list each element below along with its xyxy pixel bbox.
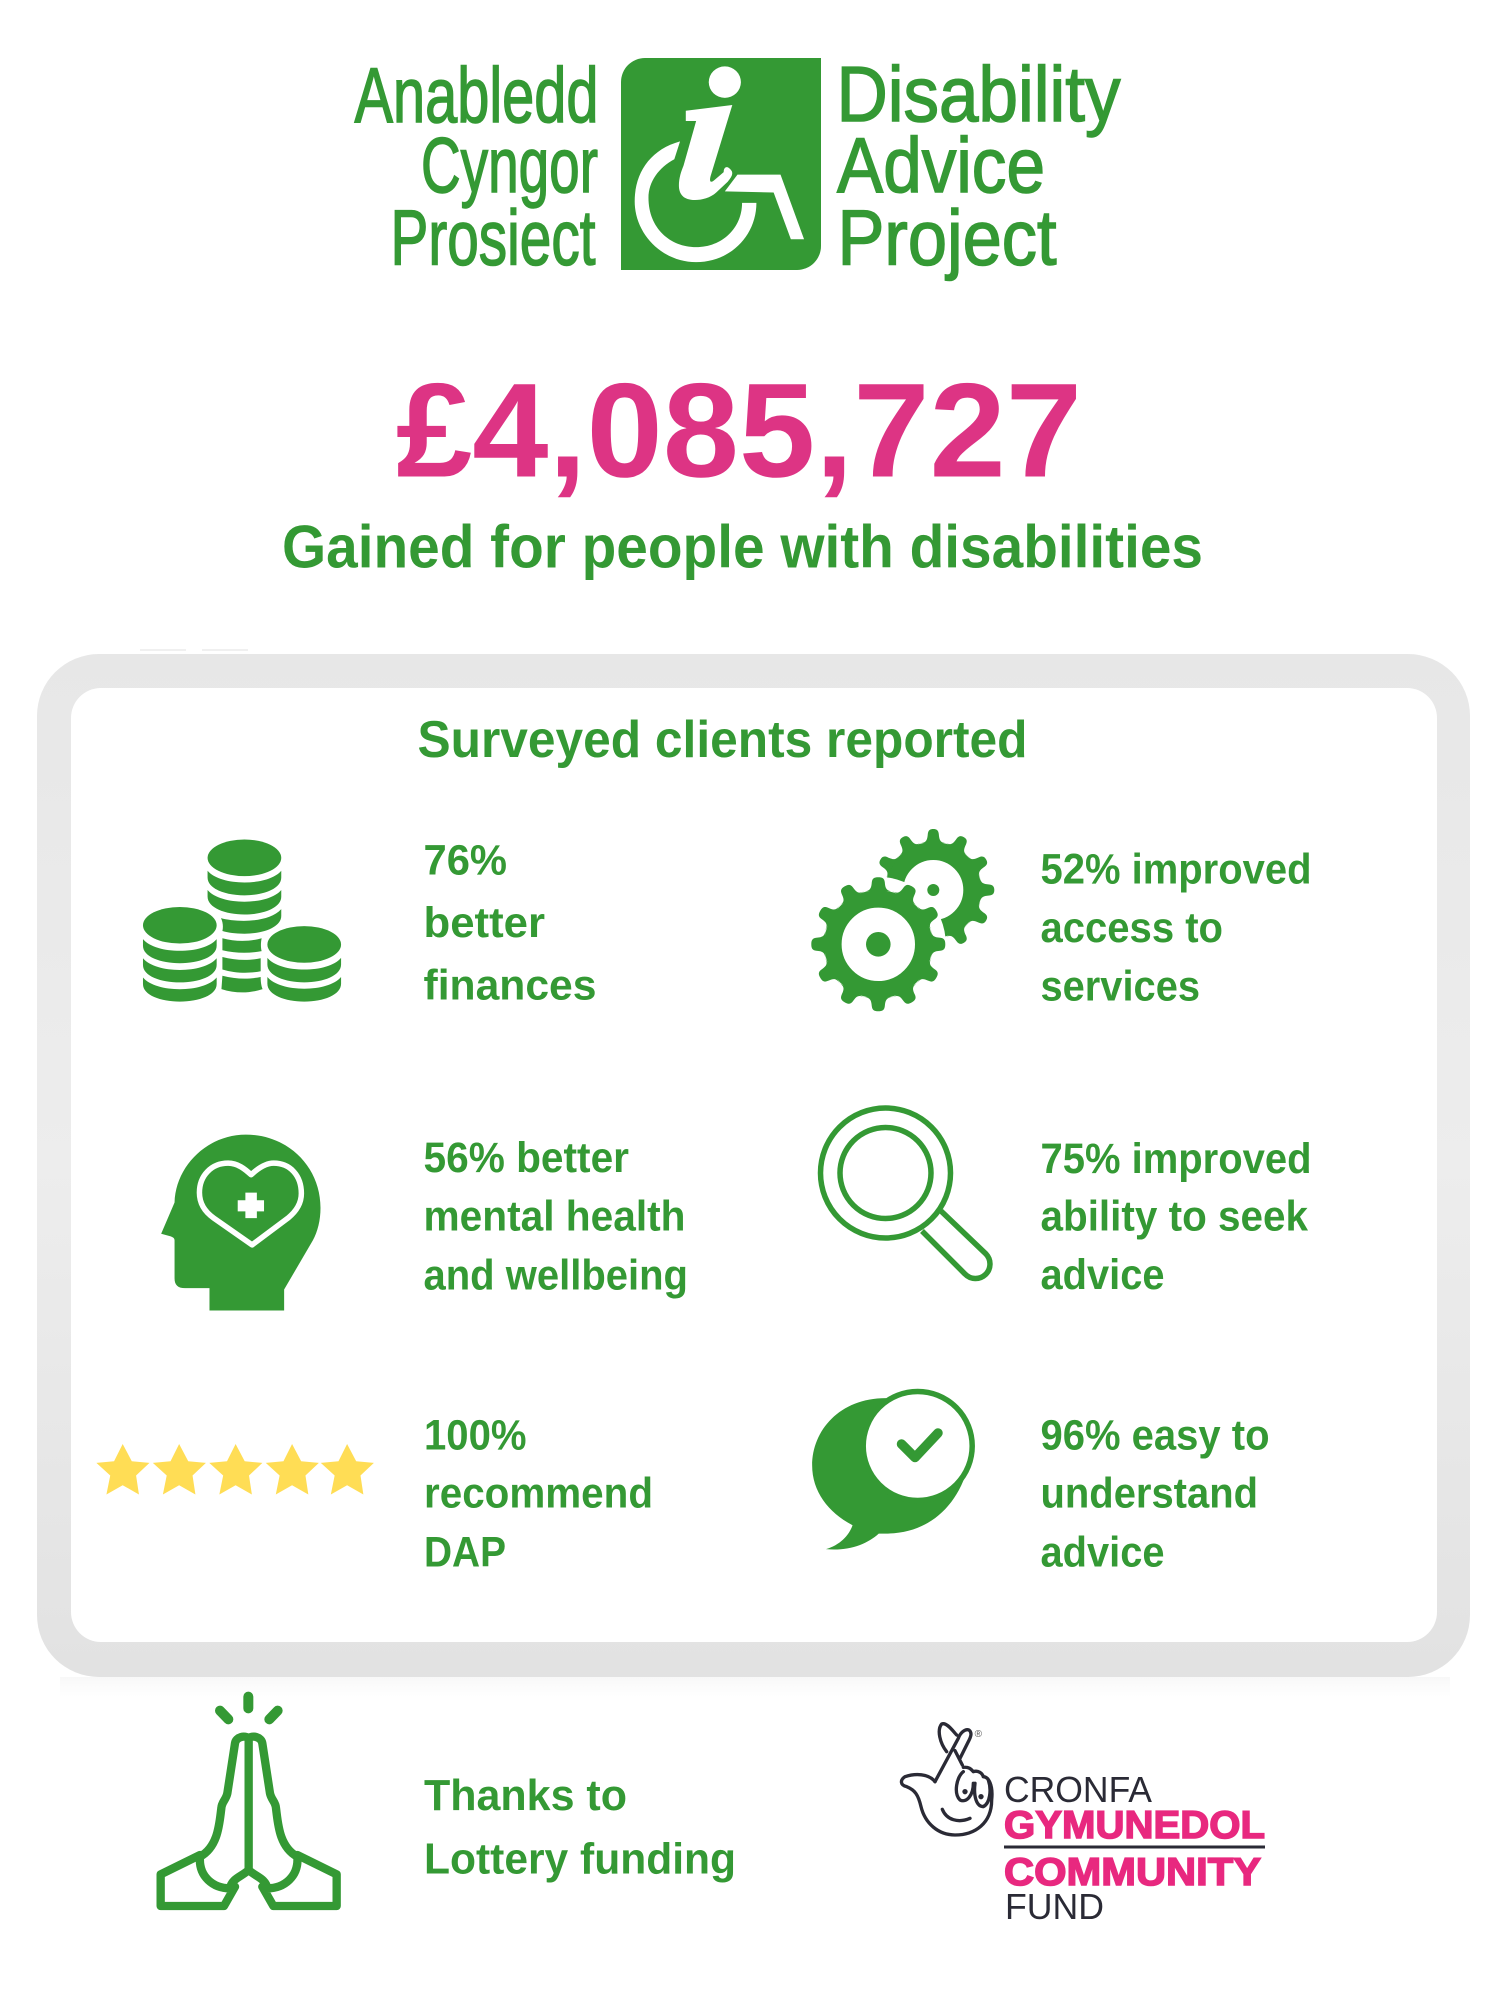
logo text: English name: Project: [838, 194, 1057, 282]
stat: access to services: services: [1040, 962, 1200, 1010]
logo icon: wheelchair information symbol: [621, 58, 821, 270]
icon: crossed fingers hand: [901, 1724, 992, 1835]
thanks text: [424, 1771, 736, 1884]
icon: magnifying glass: [820, 1108, 990, 1278]
stat: ability to seek advice: 75% improved: [1040, 1135, 1312, 1183]
icon: five stars: [96, 1444, 374, 1494]
stat: better finances: better: [424, 899, 545, 947]
logo text: Welsh name: Cyngor: [421, 121, 598, 209]
icon: praying hands: [161, 1697, 337, 1906]
logo: community fund: [901, 1724, 1265, 1927]
stat: better finances: [424, 836, 596, 1010]
thanks text: Lottery funding: [424, 1834, 736, 1884]
stat: easy to understand advice: [1040, 1412, 1270, 1576]
fund name text: CRONFA: [1004, 1769, 1152, 1810]
panel: survey results: [37, 649, 1470, 1697]
stat: better finances: 76%: [424, 836, 507, 884]
stat: access to services: [1040, 846, 1312, 1010]
stat: mental health: [424, 1134, 688, 1300]
logo text: Welsh name: Anabledd: [354, 51, 598, 139]
stat: ability to seek advice: [1040, 1135, 1312, 1299]
icon: coin stacks: [143, 840, 341, 1002]
stat: recommend DAP: [424, 1412, 653, 1576]
logo text: Welsh name: [354, 51, 598, 282]
fund name text: GYMUNEDOL: [1004, 1804, 1265, 1847]
stat: ability to seek advice: ability to seek: [1040, 1192, 1308, 1240]
icon: gears: [811, 829, 994, 1012]
stat: access to services: access to: [1040, 904, 1223, 952]
icon: speech bubble with tick: [812, 1392, 972, 1550]
stat: mental health: 56% better: [424, 1134, 629, 1182]
panel heading: Surveyed clients reported: [418, 711, 1028, 769]
stat: better finances: finances: [424, 962, 596, 1010]
stat: recommend DAP: recommend: [424, 1470, 653, 1518]
stat: mental health: and wellbeing: [424, 1252, 688, 1300]
header logo: [354, 50, 1120, 282]
logo text: Welsh name: Prosiect: [390, 194, 596, 282]
fund name text: FUND: [1005, 1886, 1104, 1927]
stat: ability to seek advice: advice: [1040, 1251, 1164, 1299]
logo text: English name: Advice: [837, 121, 1045, 209]
stat: recommend DAP: 100%: [424, 1412, 526, 1460]
fund name text: [1004, 1769, 1265, 1927]
headline amount: £4,085,727: [396, 356, 1082, 506]
registered mark: ®: [975, 1729, 983, 1740]
logo text: English name: Disability: [836, 50, 1120, 138]
icon: head with heart: [161, 1135, 320, 1310]
stat: mental health: mental health: [424, 1192, 686, 1240]
stat: easy to understand advice: 96% easy to: [1040, 1412, 1270, 1460]
subheading: Gained for people with disabilities: [282, 514, 1203, 580]
logo text: English name: [836, 50, 1120, 282]
stat: easy to understand advice: advice: [1040, 1528, 1164, 1576]
fund name text: COMMUNITY: [1004, 1851, 1261, 1894]
stat: easy to understand advice: understand: [1040, 1470, 1258, 1518]
stat: recommend DAP: DAP: [424, 1528, 506, 1576]
stat: access to services: 52% improved: [1040, 846, 1312, 894]
thanks text: Thanks to: [424, 1771, 627, 1820]
